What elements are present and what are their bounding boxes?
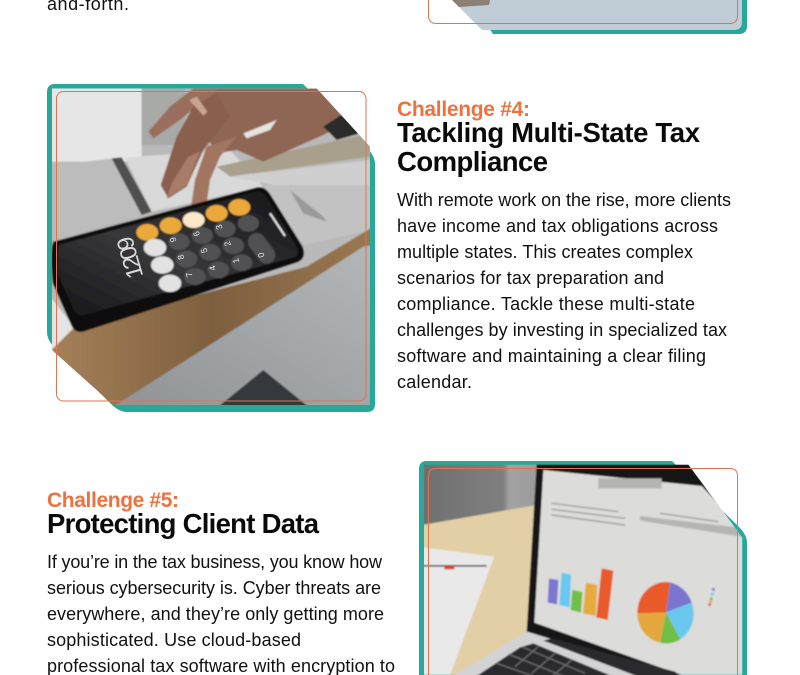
laptop screen (534, 470, 745, 675)
teal backing of previous frame (470, 0, 747, 34)
image: laptop with charts photo in frame (419, 461, 747, 675)
photo: 7 (184, 271, 195, 279)
heading: challenge 4: Compliance (397, 146, 548, 177)
photo: 2 (222, 240, 233, 248)
orange outline (428, 468, 738, 675)
body: challenge 4: calendar. (397, 372, 472, 392)
photo: 3 (214, 223, 225, 231)
photo: 6 (191, 230, 202, 238)
bar chart (548, 578, 558, 604)
hinge (543, 638, 682, 675)
body: challenge 5: serious cybersecurity is. Cyber threats are (47, 578, 381, 598)
hand: middle fingers (160, 100, 210, 199)
photo remnant (452, 0, 742, 30)
text block: challenge 4 (397, 98, 731, 392)
hand: back of hand (203, 88, 352, 162)
body: challenge 4: compliance. Tackle these multi-state (397, 294, 695, 314)
body: challenge 4: With remote work on the rise, more clients (397, 190, 731, 210)
body: challenge 4: scenarios for tax preparation and (397, 268, 664, 288)
phone body (51, 187, 304, 332)
body: challenge 4: software and maintaining a clear filing (397, 346, 706, 366)
photo (422, 463, 745, 675)
label: challenge 4: Challenge #4: (397, 98, 530, 121)
orange outline (56, 92, 366, 401)
tablet (422, 547, 494, 675)
calculator display digits: 1209 (111, 234, 148, 282)
photo: 5 (199, 247, 210, 254)
dark keys (168, 215, 267, 285)
body: challenge 5: sophisticated. Use cloud-based (47, 630, 301, 650)
photo (50, 87, 373, 407)
body: challenge 5: everywhere, and they’re only getting more (47, 604, 384, 624)
white keys (144, 239, 166, 256)
photo: 8 (175, 253, 186, 261)
teal backing (47, 84, 375, 412)
label: challenge 5: Challenge #5: (47, 489, 179, 512)
hand: upper finger (148, 88, 220, 138)
phone screen (57, 192, 298, 315)
orange keys (136, 224, 158, 241)
laptop base (452, 630, 638, 675)
teal backing (419, 461, 747, 675)
heading: challenge 4: Tackling Multi-State Tax (397, 117, 701, 148)
hand: pointing finger (190, 138, 236, 206)
pie legend (712, 588, 715, 591)
body: challenge 5: If you’re in the tax business, you know how (47, 552, 383, 572)
photo: 4 (207, 264, 218, 272)
body: challenge 4: challenges by investing in specialized tax (397, 320, 727, 340)
body: challenge 4: multiple states. This creates complex (397, 242, 693, 262)
orange outline of previous frame (428, 0, 738, 24)
laptop bezel (526, 464, 718, 675)
keyboard (476, 643, 613, 675)
text block: challenge 5 (47, 489, 395, 675)
image: previous challenge photo frame (428, 0, 747, 34)
photo: 1 (230, 257, 241, 265)
photo: 0 (256, 251, 267, 259)
photo: 9 (168, 236, 179, 244)
body: challenge 4: have income and tax obligations across (397, 216, 718, 236)
pie chart (666, 582, 692, 612)
body: challenge 4 (397, 190, 731, 392)
heading: challenge 5: Protecting Client Data (47, 508, 320, 539)
heading: challenge 4 (397, 117, 701, 177)
body: challenge 5 (47, 552, 395, 675)
image: calculator phone photo in frame (47, 84, 375, 412)
